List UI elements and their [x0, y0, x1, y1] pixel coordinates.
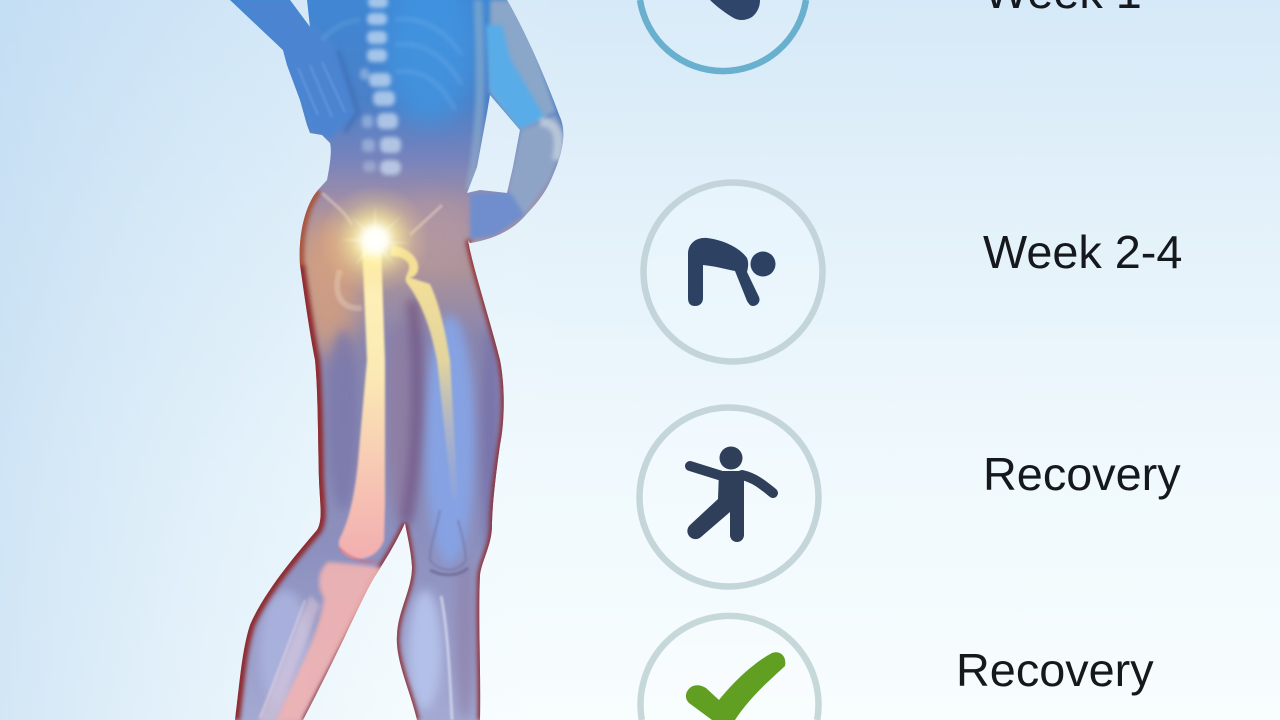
femur and main nerve — [339, 245, 385, 559]
spine vertebrae — [360, 0, 401, 175]
ring outline: step 1 — [640, 0, 806, 71]
thigh divider shading — [406, 300, 417, 523]
step 1: acute phase — [640, 0, 1142, 71]
label: recovery: Recovery — [983, 448, 1181, 500]
body base colour — [220, 0, 580, 720]
silhouette edge glow — [235, 190, 504, 720]
icon: balancing figure — [687, 446, 773, 542]
ring: step 3 — [640, 408, 818, 586]
ring: step 2 — [644, 182, 822, 362]
ring: step 1 — [640, 0, 806, 71]
pain glow — [320, 185, 430, 295]
tibia — [275, 562, 385, 720]
icon: figure fragment — [710, 0, 760, 20]
back knee and shin bone — [430, 510, 468, 720]
secondary nerve — [390, 245, 458, 500]
icon: green check mark — [686, 652, 785, 720]
left hand shading — [235, 0, 356, 138]
pelvis — [322, 193, 442, 308]
human figure with sciatic nerve — [220, 0, 580, 720]
icon: bending figure — [688, 238, 776, 306]
right arm shading — [490, 0, 556, 130]
ring: step 4 — [640, 616, 818, 720]
label: recovery: Recovery — [956, 644, 1154, 696]
step 3: recovery movement — [640, 408, 1181, 586]
ribs — [322, 19, 462, 110]
label: week 2-4: Week 2-4 — [983, 226, 1182, 278]
step 2: week 2-4 — [644, 182, 1182, 362]
torso side highlight — [470, 0, 480, 190]
step 4: recovery complete — [640, 616, 1154, 720]
